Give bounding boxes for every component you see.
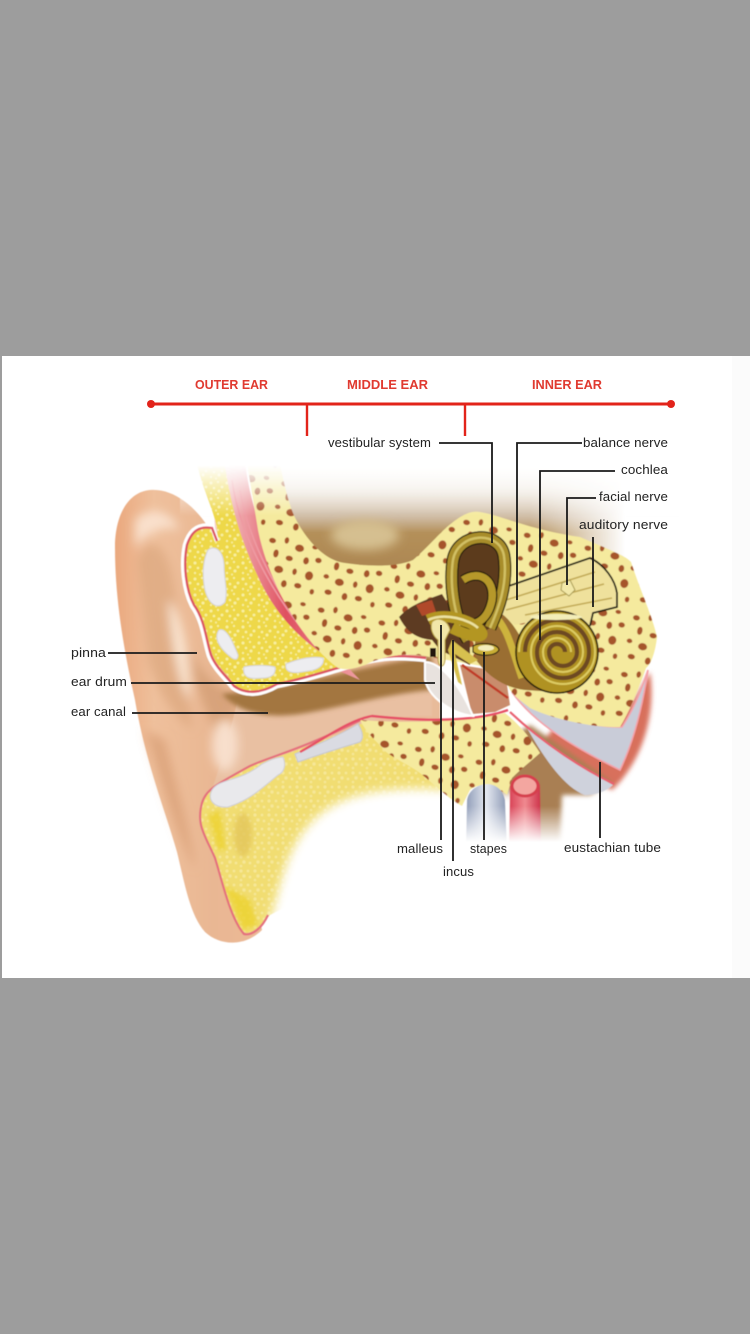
vestibule bright band [498, 618, 524, 680]
ossicles [430, 619, 499, 685]
label: auditory nerve: auditory nerve [579, 517, 668, 532]
nerve bundle [503, 558, 617, 628]
label: malleus: malleus [397, 841, 443, 856]
label: vestibular system [328, 435, 492, 543]
vestibule body [474, 614, 543, 692]
dark middle-ear cavity [399, 594, 470, 665]
temporal bone [247, 463, 657, 727]
bottom fade of vessels [455, 806, 635, 842]
heading: inner ear: INNER EAR [532, 377, 603, 392]
pale spot in brain cavity [331, 520, 399, 550]
red vessel [509, 776, 541, 850]
white diagram panel [2, 356, 750, 978]
label: balance nerve: balance nerve [583, 435, 668, 450]
ear canal tan [214, 694, 430, 786]
ear cross-section illustration [114, 468, 658, 944]
label: facial nerve: facial nerve [599, 489, 668, 504]
left end dot [147, 400, 155, 408]
blue vessel [466, 784, 506, 840]
ear canal highlight [212, 719, 238, 771]
semicircular canals [428, 538, 505, 640]
heading: middle ear: MIDDLE EAR [347, 377, 429, 392]
right fade of brain tissue [536, 480, 626, 558]
ear canal brown band [222, 656, 432, 716]
label: eustachian tube [564, 762, 661, 855]
cochlea [516, 611, 598, 693]
hollow fade behind ear lobe [264, 781, 511, 918]
dark edge of nerve canal [503, 558, 617, 626]
pink skin edge of lower bone [300, 710, 508, 752]
upper cartilage pieces [203, 548, 323, 678]
upper muscle [212, 462, 360, 680]
ear drum [425, 662, 473, 716]
label: stapes: stapes [470, 841, 507, 856]
label: balance nerve [517, 435, 668, 600]
lower gray membrane [527, 728, 613, 795]
upper fat pad [186, 468, 337, 692]
lower temporal bone [360, 713, 540, 806]
label: pinna [71, 645, 197, 660]
middle/inner divider [464, 404, 466, 436]
lower cartilage strips [210, 724, 362, 807]
label: pinna: pinna [71, 645, 107, 660]
upper gray membrane [512, 670, 648, 770]
throat tissue behind vessels [500, 722, 612, 840]
pinna and canal skin [115, 490, 440, 943]
lower fat pad [200, 724, 442, 934]
label: auditory nerve [579, 517, 668, 607]
label: eustachian tube: eustachian tube [564, 840, 661, 855]
label: facial nerve [567, 489, 668, 585]
label: vestibular system: vestibular system [328, 435, 431, 450]
label: cochlea: cochlea [621, 462, 669, 477]
right-side soft tissue [540, 672, 651, 790]
skin edge of upper fat [183, 526, 426, 694]
middle-ear cavity accents [416, 600, 510, 714]
label: ear drum: ear drum [71, 674, 127, 689]
label: incus: incus [443, 864, 474, 879]
section bracket: red line [147, 400, 675, 436]
brain cavity tissue [284, 480, 620, 566]
muscle striations [233, 488, 298, 626]
pink tube line [510, 712, 614, 784]
label: ear canal: ear canal [71, 704, 126, 719]
top fade [180, 438, 680, 516]
heading: outer ear: OUTER EAR [195, 377, 269, 392]
lower yellow accents [208, 810, 258, 930]
outer/middle divider [306, 404, 308, 436]
pinna shading [135, 511, 240, 870]
label: cochlea [540, 462, 669, 640]
facial nerve knob [561, 580, 575, 596]
pink outline of lower fat [200, 719, 363, 934]
right end dot [667, 400, 675, 408]
nerve fibres [506, 572, 612, 615]
